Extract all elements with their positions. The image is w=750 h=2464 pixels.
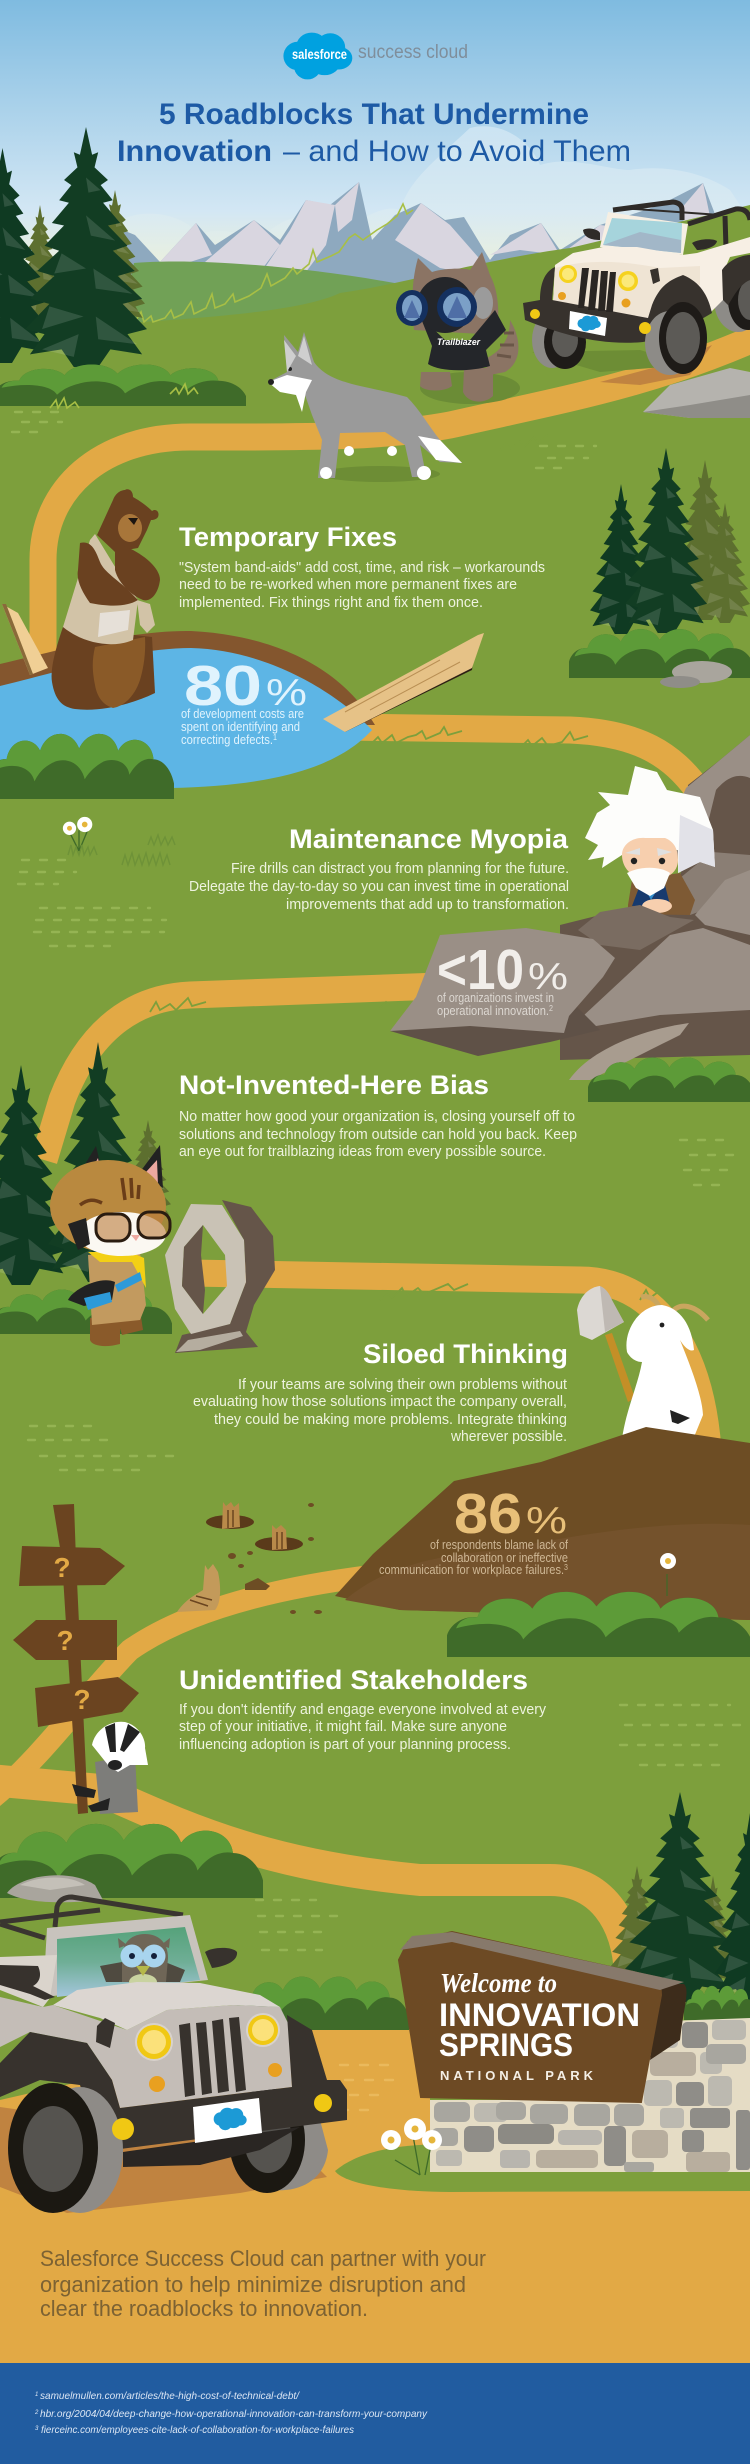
sign 3 xyxy=(35,1677,139,1727)
rear wheel xyxy=(250,2120,328,2190)
bumper and fender xyxy=(92,2015,347,2152)
stat: 86%: 86 xyxy=(454,1482,522,1546)
description: wherever possible. xyxy=(450,1429,567,1445)
bear apron xyxy=(63,534,138,644)
body xyxy=(95,1755,138,1814)
hoodie lettering: Trailblazer xyxy=(437,337,480,347)
plate cloud xyxy=(214,2108,247,2130)
question mark 2: ? xyxy=(56,1625,74,1656)
boots xyxy=(90,1310,143,1346)
stat: 80%: 1 xyxy=(273,733,277,742)
grass tufts xyxy=(68,835,175,865)
section: Siloed Thinking xyxy=(193,1339,568,1445)
sign 2 xyxy=(13,1620,117,1660)
stat: 86%: 3 xyxy=(564,1563,568,1572)
stat: 80% xyxy=(181,654,307,747)
bear arms xyxy=(115,543,160,600)
description: If you don't identify and engage everyone involved at every xyxy=(179,1702,547,1718)
section: Unidentified Stakeholders xyxy=(179,1665,547,1753)
grass island xyxy=(335,2140,750,2192)
stone O ring xyxy=(165,1200,275,1353)
bear pocket xyxy=(98,610,130,637)
jeep: top right xyxy=(523,202,750,375)
description: an eye out for trailblazing ideas from every possible source. xyxy=(179,1144,546,1160)
chipmunk xyxy=(177,1564,220,1612)
back hill xyxy=(120,261,440,330)
rocks: Einstein outcrop xyxy=(560,735,750,1060)
heading: Temporary Fixes xyxy=(179,522,397,552)
product name: success cloud xyxy=(358,42,468,63)
question mark 1: ? xyxy=(53,1552,71,1583)
sky background xyxy=(0,0,750,320)
welcome sign xyxy=(399,1932,687,2102)
heading: Not-Invented-Here Bias xyxy=(179,1070,489,1100)
footnotes: samuelmullen.com/articles/the-high-cost-of-technical-debt/ xyxy=(40,2390,300,2402)
bush: behind bobcat xyxy=(0,1290,173,1334)
description: step of your initiative, it might fail. Make sure anyone xyxy=(179,1719,507,1735)
orange ground xyxy=(0,2029,750,2364)
raccoon tail xyxy=(483,320,518,375)
front bumper xyxy=(523,267,712,343)
pond xyxy=(0,631,375,788)
welcome sign: SPRINGS xyxy=(439,2027,573,2063)
question mark 3: ? xyxy=(73,1684,91,1715)
license plate xyxy=(193,2098,262,2143)
ring back xyxy=(175,1200,275,1353)
jeep body xyxy=(552,237,750,320)
sign 1 xyxy=(19,1546,125,1586)
bear mascot xyxy=(52,489,160,710)
description: improvements that add up to transformation. xyxy=(286,897,569,913)
footer band xyxy=(0,2363,750,2464)
trees: lower right xyxy=(610,1792,750,2003)
closing statement: Salesforce Success Cloud can partner with your xyxy=(40,2246,486,2271)
small rocks xyxy=(660,661,732,688)
dirt mound xyxy=(335,1427,750,1620)
windshield glass xyxy=(57,1927,200,1997)
ring face with hole xyxy=(165,1204,246,1334)
jacket xyxy=(628,873,695,915)
rear wheel xyxy=(714,268,750,332)
roll bar xyxy=(0,1897,183,1938)
sign name: INNOVATION xyxy=(439,1997,640,2033)
hoodie xyxy=(420,310,506,370)
closing statement: clear the roadblocks to innovation. xyxy=(40,2296,368,2321)
grille bars xyxy=(179,2017,246,2097)
roll bars xyxy=(613,202,750,248)
sign face xyxy=(399,1932,661,2102)
heading: Maintenance Myopia xyxy=(289,824,569,854)
closing statement: organization to help minimize disruption and xyxy=(40,2272,466,2297)
grille xyxy=(578,268,616,312)
rear deck xyxy=(0,1955,57,2007)
title: 5 Roadblocks That Undermine xyxy=(159,98,589,131)
bush: pond xyxy=(0,734,175,799)
stat: 80%: spent on identifying and xyxy=(181,720,300,734)
sign top edge xyxy=(400,1932,684,1990)
windshield frame xyxy=(43,1915,208,1997)
stat: 86%: % xyxy=(526,1500,567,1542)
right plank xyxy=(323,633,484,732)
description xyxy=(179,1702,547,1753)
description xyxy=(189,861,569,913)
jeep: bottom left xyxy=(0,1897,347,2213)
owl xyxy=(100,1934,185,1990)
daisy on mound xyxy=(660,1553,676,1596)
front left wheel xyxy=(532,312,572,368)
description: No matter how good your organization is, closing yourself off to xyxy=(179,1109,575,1125)
raccoon feet xyxy=(420,368,493,402)
sign back side xyxy=(650,1984,687,2060)
seat strap xyxy=(0,1965,55,2000)
description: Delegate the day-to-day so you can invest time in operational xyxy=(189,879,569,895)
trail paths xyxy=(0,336,750,1975)
mountains xyxy=(90,182,750,300)
post xyxy=(53,1504,88,1814)
ears xyxy=(72,1145,163,1188)
bandana xyxy=(88,1252,146,1288)
clouds xyxy=(0,126,750,300)
description xyxy=(179,560,545,611)
goat mascot xyxy=(622,1297,708,1439)
footnotes xyxy=(34,2390,428,2436)
chipmunk holes xyxy=(206,1502,303,1551)
turn signals xyxy=(112,2063,332,2140)
title: Innovation xyxy=(117,135,272,168)
logo cloud xyxy=(283,33,352,79)
stat: <10%: operational innovation. xyxy=(437,1004,563,1018)
description: Fire drills can distract you from planning for the future. xyxy=(231,861,569,877)
hood xyxy=(412,252,498,335)
footnotes: 3 xyxy=(35,2426,39,2432)
front right wheel xyxy=(645,311,695,375)
closing statement xyxy=(40,2246,486,2321)
stat: 86%: collaboration or ineffective xyxy=(441,1551,568,1565)
license plate xyxy=(569,311,607,336)
grass fringe on hill xyxy=(135,204,413,322)
section: Maintenance Myopia xyxy=(189,824,569,913)
rock: top right xyxy=(643,368,750,418)
signpost xyxy=(13,1504,139,1814)
footnotes: fierceinc.com/employees-cite-lack-of-collaboration-for-workplace-failures xyxy=(41,2424,355,2436)
footnotes: 1 xyxy=(35,2392,38,2398)
jeep mirrors xyxy=(583,229,600,240)
wolf xyxy=(268,332,462,482)
head xyxy=(50,1160,166,1252)
salesforce logo xyxy=(283,33,352,79)
raccoon mascot with binoculars xyxy=(396,252,520,404)
description xyxy=(179,1109,577,1160)
heading: Unidentified Stakeholders xyxy=(179,1665,528,1695)
bear head xyxy=(97,489,159,552)
bush: mound xyxy=(445,1592,750,1657)
stat: 80%: % xyxy=(266,672,307,714)
stat: <10% xyxy=(437,938,568,1018)
bush: lower right xyxy=(684,1986,750,2020)
headlights xyxy=(135,2013,280,2061)
grass tufts under bush xyxy=(50,384,198,408)
speckles on road xyxy=(340,2065,395,2110)
logo wordmark: salesforce xyxy=(292,46,347,62)
body xyxy=(0,1997,292,2108)
description xyxy=(193,1377,567,1445)
stat: 86%: of respondents blame lack of xyxy=(430,1538,568,1552)
stat: 86%: communication for workplace failures. xyxy=(379,1563,588,1577)
hood xyxy=(53,1982,280,2030)
side mirror xyxy=(205,1948,237,1968)
trees: right of Temporary Fixes xyxy=(590,448,750,634)
grass on trail edges xyxy=(150,435,658,1300)
stone wall xyxy=(430,2018,750,2172)
section: Temporary Fixes xyxy=(179,522,545,611)
stat: 80%: of development costs are xyxy=(181,707,304,721)
head xyxy=(92,1722,148,1772)
heading: Siloed Thinking xyxy=(363,1339,568,1369)
binoculars xyxy=(473,287,493,319)
badger mascot xyxy=(72,1722,148,1814)
front wheel xyxy=(8,2083,123,2213)
jeep windshield xyxy=(600,212,688,255)
dirt crumbs xyxy=(228,1503,322,1614)
description: influencing adoption is part of your planning process. xyxy=(179,1737,511,1753)
stat: 86% xyxy=(379,1482,568,1577)
shovel xyxy=(577,1286,635,1402)
stat: <10%: 2 xyxy=(549,1004,553,1013)
title xyxy=(117,98,631,168)
bush: right xyxy=(568,629,750,678)
jeep shadow xyxy=(532,350,690,372)
left plank xyxy=(2,604,48,675)
side marker xyxy=(650,268,660,284)
stat: <10%: % xyxy=(528,956,568,998)
description: they could be making more problems. Integrate thinking xyxy=(214,1412,567,1428)
stat: <10%: of organizations invest in xyxy=(437,991,554,1005)
Einstein mascot xyxy=(585,766,715,915)
daisies: left xyxy=(63,817,92,851)
stat rock xyxy=(390,905,694,1080)
description: If your teams are solving their own problems without xyxy=(238,1377,567,1393)
trees: top left xyxy=(0,127,147,367)
trees: left middle xyxy=(0,1042,171,1285)
stat: <10%: <10 xyxy=(437,938,524,1002)
glasses xyxy=(96,1212,170,1241)
side marker xyxy=(96,2018,115,2048)
headlights xyxy=(559,265,577,283)
footnotes: hbr.org/2004/04/deep-change-how-operational-innovation-can-transform-your-company xyxy=(40,2408,428,2420)
footnotes: 2 xyxy=(34,2410,39,2416)
bush: behind jeep xyxy=(233,1977,410,2030)
description: solutions and technology from outside can hold you back. Keep xyxy=(179,1127,577,1143)
bobcat mascot xyxy=(50,1145,170,1346)
description: need to be re-worked when more permanent fixes are xyxy=(179,577,517,593)
bush: lower left xyxy=(0,1824,264,1898)
face xyxy=(622,838,678,880)
description: "System band-aids" add cost, time, and risk – workarounds xyxy=(179,560,545,576)
stat: 80%: 80 xyxy=(184,654,262,718)
title: – and How to Avoid Them xyxy=(283,135,631,168)
sign script line: Welcome to xyxy=(440,1968,557,1998)
stat: 80%: correcting defects. xyxy=(181,733,283,747)
arms and gloves xyxy=(68,1280,115,1306)
bush: right lower xyxy=(587,1058,750,1102)
sign subtitle: NATIONAL PARK xyxy=(440,2068,598,2083)
body xyxy=(88,1252,146,1325)
dark road shade under jeep xyxy=(600,345,712,385)
description: implemented. Fix things right and fix them once. xyxy=(179,595,483,611)
daisies: sign xyxy=(381,2118,442,2175)
bush: top left xyxy=(0,365,247,406)
bear lower body xyxy=(52,627,155,710)
jeep shadow xyxy=(0,2107,327,2213)
rear fender xyxy=(722,255,750,305)
meadow speckles xyxy=(12,412,740,1950)
section: Not-Invented-Here Bias xyxy=(179,1070,577,1160)
hair xyxy=(585,766,715,873)
ring base stone xyxy=(176,1331,243,1352)
description: evaluating how those solutions impact the company overall, xyxy=(193,1394,567,1410)
wolf markings xyxy=(268,375,462,463)
rock on bush xyxy=(7,1875,103,1902)
ring inner wall xyxy=(182,1225,205,1314)
